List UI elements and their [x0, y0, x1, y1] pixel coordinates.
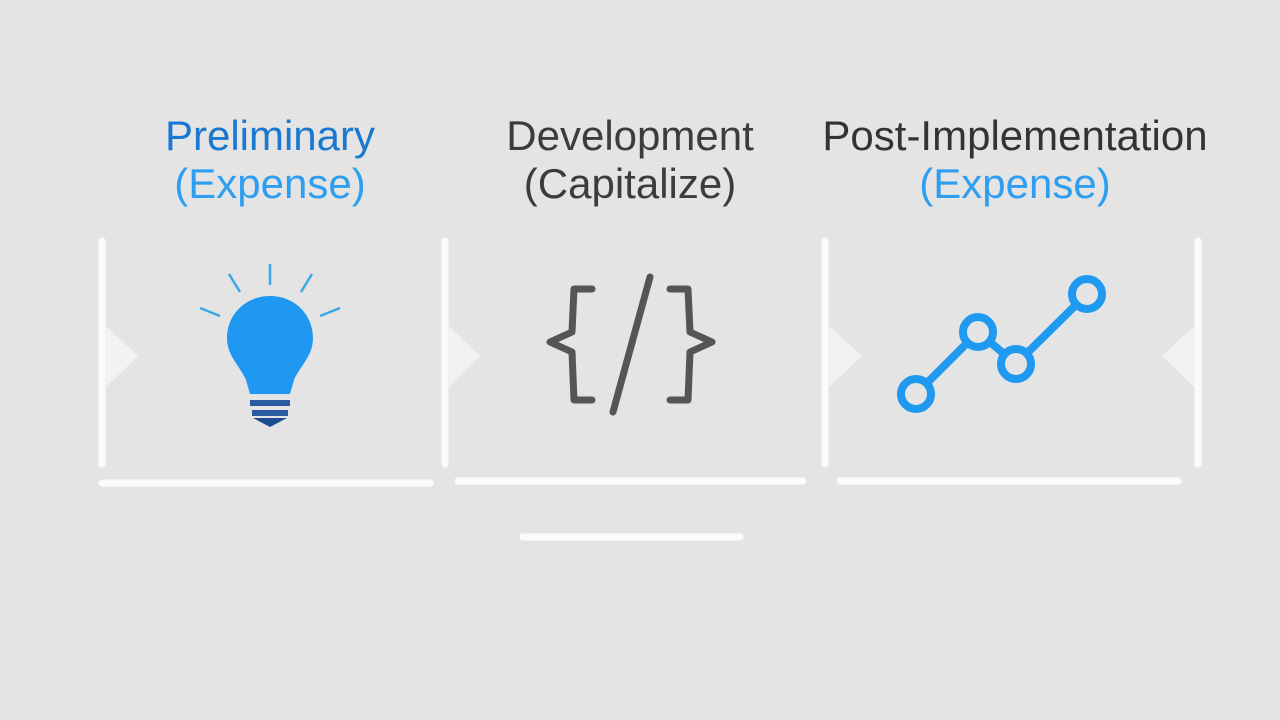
title: post-implementation: (Expense) [919, 160, 1111, 207]
title: preliminary: (Expense) [174, 160, 366, 207]
title: preliminary: Preliminary [165, 112, 375, 159]
title: post-implementation: Post-Implementation [822, 112, 1208, 159]
title: post-implementation [822, 112, 1208, 207]
icon: code braces [550, 277, 712, 412]
title: preliminary [165, 112, 375, 207]
icon: line chart [901, 279, 1102, 409]
title: development [506, 112, 754, 207]
icon: light bulb [200, 264, 340, 427]
title: development: (Capitalize) [524, 160, 736, 207]
title: development: Development [506, 112, 754, 159]
